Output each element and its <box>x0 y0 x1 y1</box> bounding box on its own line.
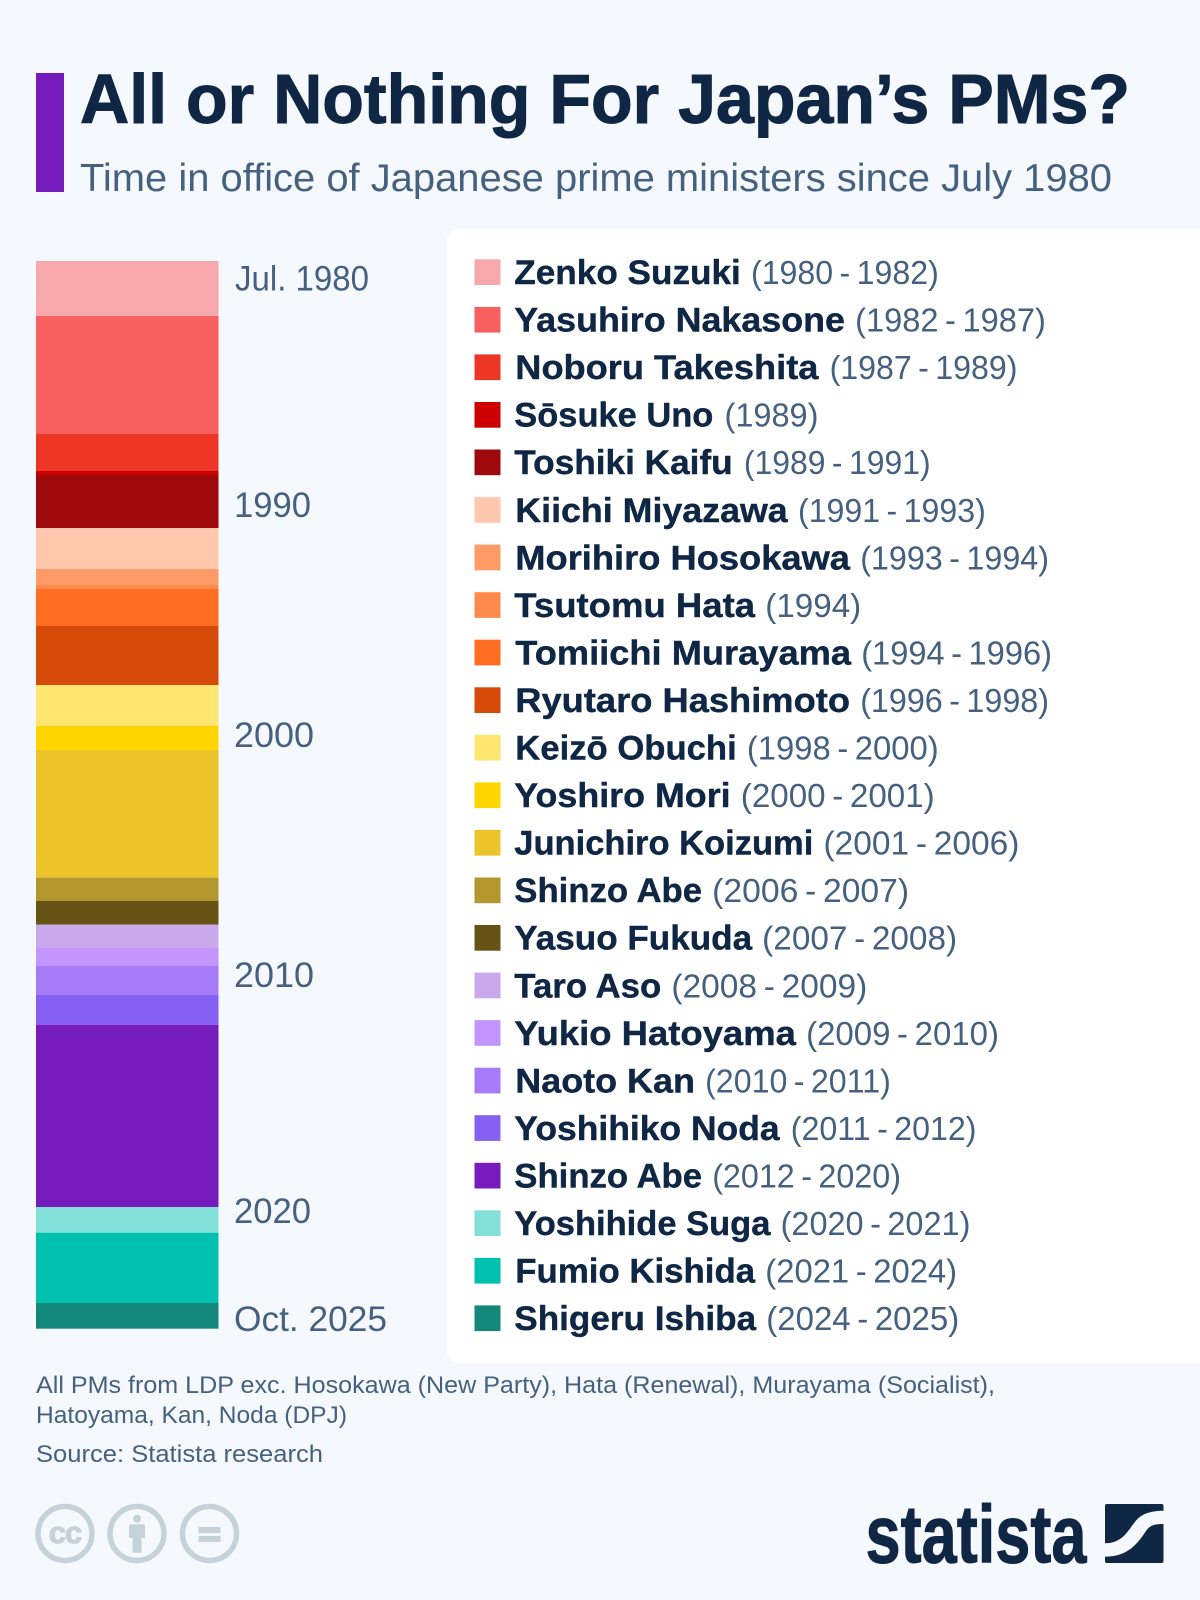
legend row: Toshiki Kaifu <box>474 444 931 482</box>
axis label: 2000: 2000 <box>234 716 314 755</box>
legend row: Shinzo Abe 2012: Shinzo Abe <box>514 1158 702 1196</box>
logo: statista: statista <box>866 1490 1088 1580</box>
legend row: Taro Aso: Taro Aso <box>514 967 661 1005</box>
legend row: Shigeru Ishiba: (2024 - 2025) <box>766 1300 959 1337</box>
legend row: Noboru Takeshita: Noboru Takeshita <box>515 349 820 387</box>
legend row: Keizo Obuchi <box>474 730 939 768</box>
legend row: Yasuhiro Nakasone <box>474 302 1046 340</box>
footnote <box>36 1372 995 1429</box>
legend row: Toshiki Kaifu: (1989 - 1991) <box>744 444 931 481</box>
legend row: Yoshihiko Noda: (2011 - 2012) <box>791 1110 976 1147</box>
icon: attribution person <box>110 1506 164 1560</box>
icon: no derivatives <box>182 1506 236 1560</box>
axis label: 2010: 2010 <box>234 956 314 995</box>
legend row: Junichiro Koizumi: (2001 - 2006) <box>824 825 1019 862</box>
legend row: Tsutomu Hata: (1994) <box>765 587 861 624</box>
legend row: Ryutaro Hashimoto: (1996 - 1998) <box>860 682 1049 719</box>
legend row: Yoshiro Mori <box>474 777 935 815</box>
legend row: Yoshihiko Noda <box>474 1110 976 1148</box>
legend row: Toshiki Kaifu: Toshiki Kaifu <box>514 444 733 482</box>
legend row: Yoshiro Mori: Yoshiro Mori <box>514 777 731 815</box>
legend row: Ryutaro Hashimoto: Ryutaro Hashimoto <box>515 682 850 720</box>
legend row: Tomiichi Murayama <box>474 634 1052 672</box>
legend row: Yasuo Fukuda: Yasuo Fukuda <box>514 920 753 958</box>
legend row: Fumio Kishida: Fumio Kishida <box>515 1253 756 1291</box>
legend row: Sosuke Uno <box>474 397 818 435</box>
legend row: Yasuhiro Nakasone: Yasuhiro Nakasone <box>514 302 845 340</box>
legend row: Taro Aso: (2008 - 2009) <box>671 967 867 1004</box>
panel: legend <box>447 229 1200 1363</box>
title: All or Nothing For Japan’s PMs? <box>80 60 1130 138</box>
legend row: Naoto Kan: Naoto Kan <box>515 1062 695 1100</box>
source: Source: Statista research <box>36 1441 323 1468</box>
legend row: Zenko Suzuki: (1980 - 1982) <box>751 254 939 291</box>
legend row: Naoto Kan: (2010 - 2011) <box>705 1062 891 1099</box>
axis label: 2020: 2020 <box>234 1192 311 1231</box>
footnote: All PMs from LDP exc. Hosokawa (New Party), Hata (Renewal), Murayama (Socialist), <box>36 1372 995 1399</box>
axis label: 1990: 1990 <box>234 486 311 525</box>
legend row: Yoshihide Suga <box>474 1205 970 1243</box>
footnote: Hatoyama, Kan, Noda (DPJ) <box>36 1402 347 1429</box>
legend row: Zenko Suzuki <box>474 254 939 292</box>
legend row: Zenko Suzuki: Zenko Suzuki <box>514 254 741 292</box>
legend row: Shinzo Abe 2006: Shinzo Abe <box>514 872 702 910</box>
legend row: Tsutomu Hata <box>474 587 861 625</box>
legend row: Shinzo Abe 2012 <box>474 1158 901 1196</box>
legend row: Morihiro Hosokawa <box>474 539 1049 577</box>
legend row: Shinzo Abe 2012: (2012 - 2020) <box>712 1158 901 1194</box>
legend row: Yasuo Fukuda: (2007 - 2008) <box>762 920 957 957</box>
legend row: Yoshiro Mori: (2000 - 2001) <box>741 777 935 814</box>
legend row: Fumio Kishida: (2021 - 2024) <box>765 1253 957 1290</box>
legend row: Noboru Takeshita: (1987 - 1989) <box>830 349 1017 386</box>
legend row: Naoto Kan <box>474 1062 891 1100</box>
icon: creative commons: cc <box>49 1515 82 1550</box>
legend row: Yukio Hatoyama: (2009 - 2010) <box>806 1015 999 1052</box>
legend row: Kiichi Miyazawa <box>474 492 986 530</box>
legend row: Yoshihide Suga: Yoshihide Suga <box>514 1205 772 1243</box>
stacked bar chart <box>36 261 218 1329</box>
legend row: Ryutaro Hashimoto <box>474 682 1049 720</box>
legend row: Junichiro Koizumi <box>474 825 1019 863</box>
legend row: Yukio Hatoyama <box>474 1015 999 1053</box>
legend row: Shinzo Abe 2006: (2006 - 2007) <box>712 872 909 909</box>
legend row: Noboru Takeshita <box>474 349 1017 387</box>
legend row: Yasuhiro Nakasone: (1982 - 1987) <box>855 302 1046 339</box>
legend row: Sosuke Uno: (1989) <box>724 397 818 434</box>
legend row: Fumio Kishida <box>474 1253 957 1291</box>
legend row: Morihiro Hosokawa: (1993 - 1994) <box>860 539 1049 576</box>
subtitle: Time in office of Japanese prime ministers since July 1980 <box>80 157 1112 200</box>
legend row: Shigeru Ishiba <box>474 1300 959 1338</box>
legend row: Junichiro Koizumi: Junichiro Koizumi <box>514 825 813 863</box>
legend row: Shinzo Abe 2006 <box>474 872 909 910</box>
legend row: Morihiro Hosokawa: Morihiro Hosokawa <box>515 539 851 577</box>
legend row: Sosuke Uno: Sōsuke Uno <box>514 397 713 435</box>
legend row: Yukio Hatoyama: Yukio Hatoyama <box>514 1015 797 1053</box>
legend row: Keizo Obuchi: (1998 - 2000) <box>747 730 939 766</box>
legend row: Yoshihiko Noda: Yoshihiko Noda <box>514 1110 781 1148</box>
header accent bar <box>36 73 64 192</box>
axis label: Jul. 1980: Jul. 1980 <box>235 260 369 298</box>
legend row: Tomiichi Murayama: Tomiichi Murayama <box>515 634 852 672</box>
icon: creative commons <box>38 1506 92 1560</box>
legend row: Kiichi Miyazawa: Kiichi Miyazawa <box>515 492 789 530</box>
legend row: Tomiichi Murayama: (1994 - 1996) <box>861 634 1052 671</box>
axis label: Oct. 2025: Oct. 2025 <box>234 1300 387 1339</box>
legend row: Taro Aso <box>474 967 867 1005</box>
legend row: Yasuo Fukuda <box>474 920 957 958</box>
legend row: Shigeru Ishiba: Shigeru Ishiba <box>514 1300 757 1338</box>
legend row: Yoshihide Suga: (2020 - 2021) <box>781 1205 970 1242</box>
legend row: Tsutomu Hata: Tsutomu Hata <box>514 587 756 625</box>
legend row: Keizo Obuchi: Keizō Obuchi <box>515 730 737 768</box>
legend row: Kiichi Miyazawa: (1991 - 1993) <box>798 492 986 529</box>
